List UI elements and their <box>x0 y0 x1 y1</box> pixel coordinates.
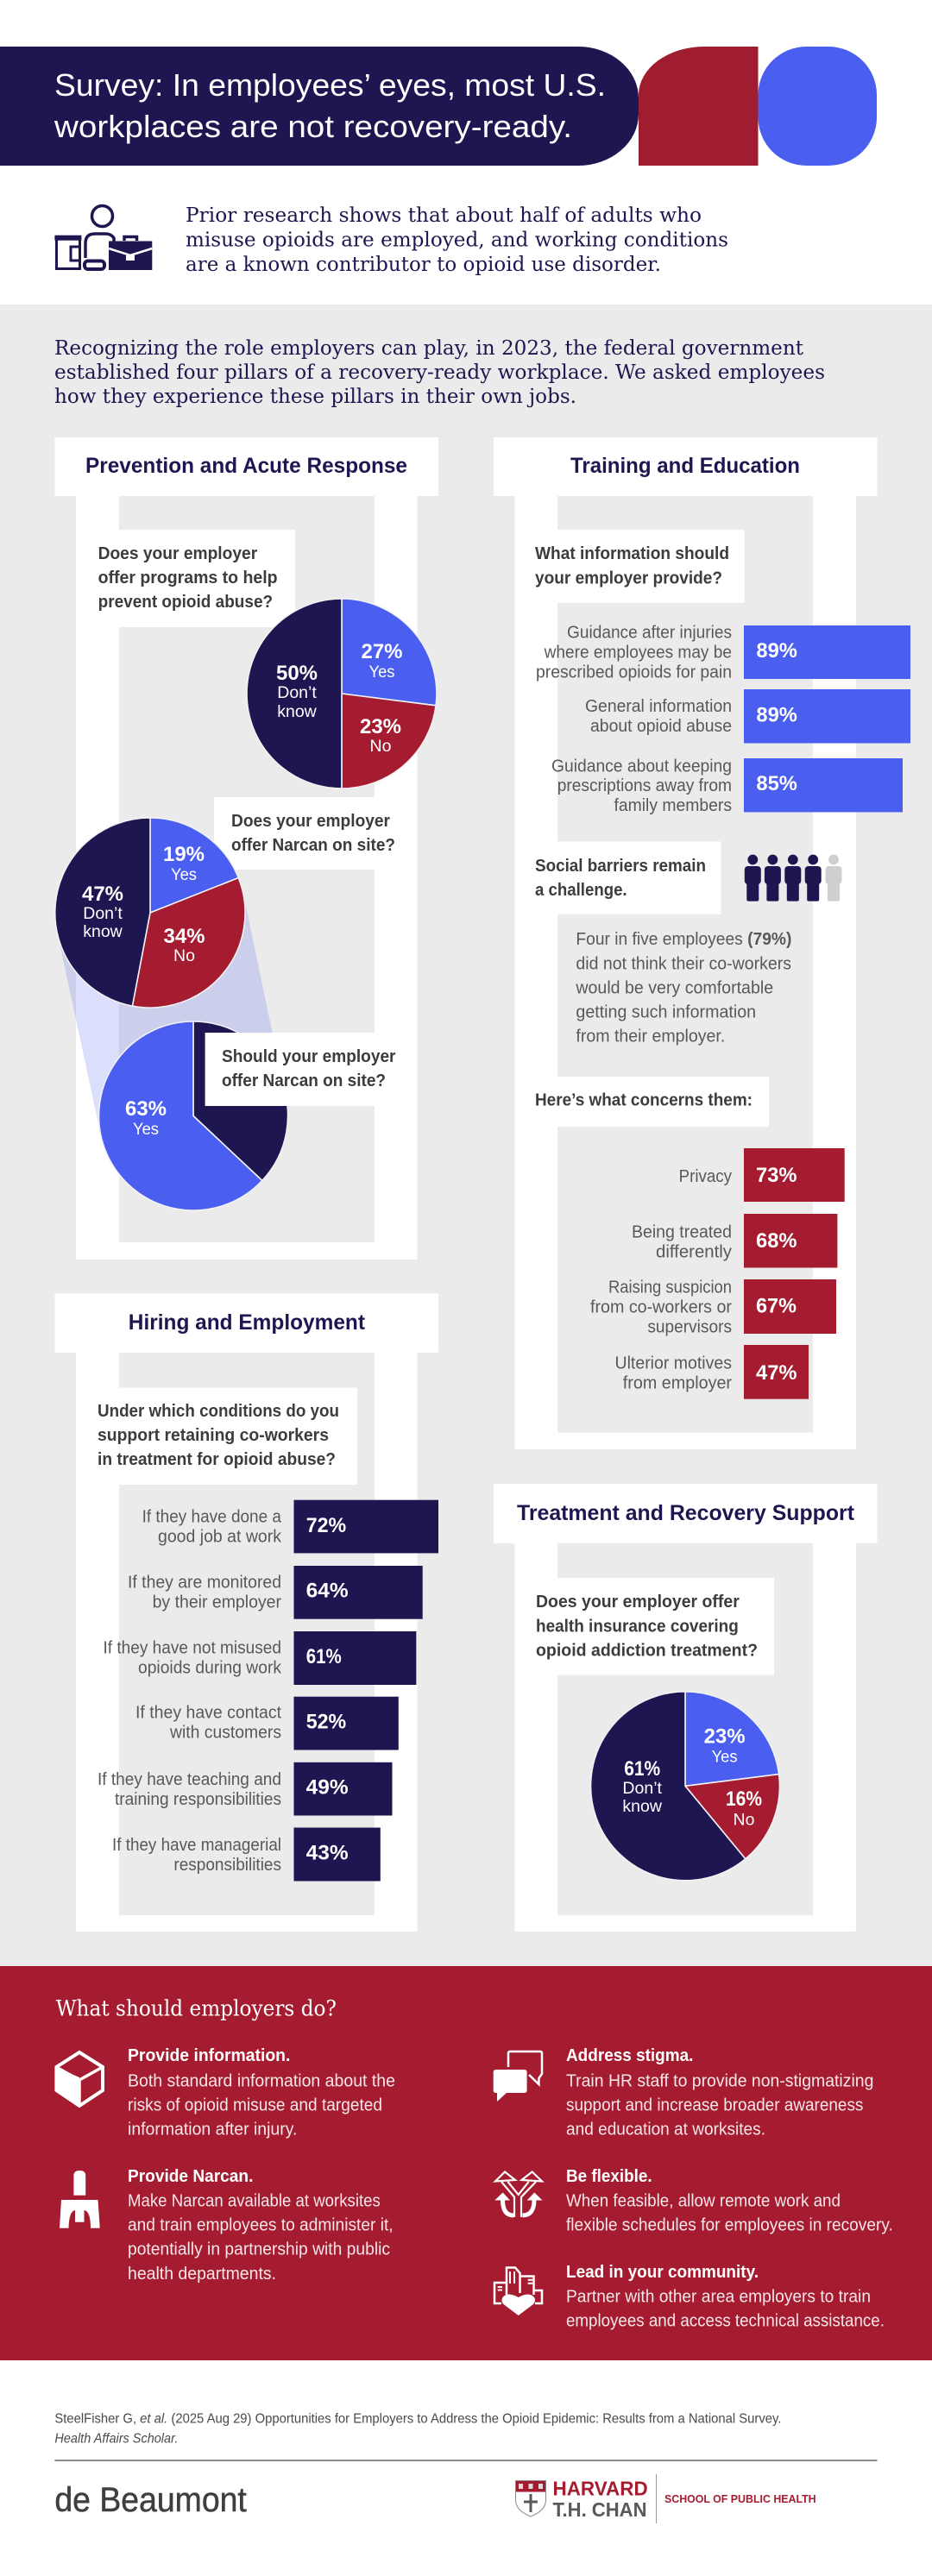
pie chart: employer offers Narcan: No <box>173 946 195 965</box>
bar chart: conditions for retaining co-workers: by their employer <box>153 1593 281 1612</box>
text: be flexible: flexible schedules for employees in recovery. <box>566 2215 893 2234</box>
bar chart: information employer should provide: prescribed opioids for pain <box>536 663 732 682</box>
bar chart: concerns: Privacy <box>679 1167 732 1186</box>
bar chart: conditions for retaining co-workers: good job at work <box>158 1528 282 1547</box>
question: health insurance: opioid addiction treatment? <box>536 1641 758 1660</box>
text: provide Narcan: health departments. <box>128 2265 276 2284</box>
text: provide Narcan: and train employees to administer it, <box>128 2215 394 2234</box>
title banner <box>0 47 877 166</box>
heading: Training and Education: Training and Education <box>570 454 800 478</box>
survey section background <box>0 305 932 1966</box>
intro text: are a known contributor to opioid use disorder. <box>186 254 661 276</box>
bar chart: concerns: Raising suspicion <box>608 1279 732 1297</box>
question: prevention programs: offer programs to help <box>98 569 278 587</box>
text: address stigma: Address stigma. <box>566 2046 693 2065</box>
question: prevention programs: Does your employer <box>98 544 257 563</box>
pie chart: employer offers Narcan <box>55 818 245 1008</box>
pie chart: prevention programs: 27% <box>361 640 403 663</box>
bar chart: concerns: differently <box>656 1243 732 1262</box>
text block: four in five employees: from their employer. <box>576 1027 725 1046</box>
text block: four in five employees: would be very comfortable <box>575 979 773 998</box>
question: retaining co-workers: Under which conditions do you <box>98 1402 339 1421</box>
bar chart: conditions for retaining co-workers: If they have not misused <box>104 1639 281 1658</box>
bar chart: information employer should provide: family members <box>614 796 732 815</box>
pie chart: prevention programs: Yes <box>369 663 395 682</box>
question: Narcan on site: Does your employer <box>231 812 390 831</box>
bar chart: conditions for retaining co-workers: If they have teaching and <box>98 1770 281 1789</box>
text: provide information: Provide information. <box>128 2046 290 2065</box>
text: provide Narcan: Provide Narcan. <box>128 2167 253 2186</box>
question: retaining co-workers <box>98 1388 357 1485</box>
pie chart: health insurance: Don’t <box>622 1779 663 1798</box>
heading: Hiring and Employment: Hiring and Employment <box>129 1310 366 1335</box>
subheading: social barriers <box>535 841 721 914</box>
bar chart: conditions for retaining co-workers: If they are monitored <box>128 1574 281 1593</box>
icon: person with desk and briefcase <box>54 205 152 270</box>
pie chart: health insurance <box>591 1692 779 1881</box>
logo: Harvard T.H. Chan School of Public Health: HARVARD <box>552 2478 648 2500</box>
bar chart: conditions for retaining co-workers: 43% <box>306 1841 349 1865</box>
pie chart: employer offers Narcan: know <box>83 922 123 941</box>
icon: speech bubbles <box>494 2051 542 2102</box>
bar chart: conditions for retaining co-workers: training responsibilities <box>115 1790 281 1809</box>
question: retaining co-workers: support retaining co-workers <box>98 1426 329 1445</box>
pie chart: employer offers Narcan: 34% <box>163 925 205 948</box>
text: address stigma: Train HR staff to provide non-stigmatizing <box>566 2071 873 2090</box>
text: provide Narcan <box>128 2167 394 2284</box>
panel: Training and Education <box>494 437 910 1449</box>
heading: Hiring and Employment <box>54 1293 438 1353</box>
bar chart: conditions for retaining co-workers: with customers <box>169 1724 281 1743</box>
panel: Prevention and Acute Response <box>54 437 438 1260</box>
text block: four in five employees: Four in five employees (79%) <box>576 930 791 949</box>
bar chart: information employer should provide: 89% <box>756 639 797 663</box>
bar chart: concerns: Being treated <box>632 1223 732 1242</box>
text: provide information <box>128 2046 395 2139</box>
bar chart: information employer should provide: Guidance after injuries <box>567 624 732 643</box>
bar chart: concerns: 68% <box>756 1229 797 1253</box>
context paragraph: Recognizing the role employers can play, in 2023, the federal government <box>54 337 804 360</box>
text: lead in your community: Lead in your community. <box>566 2263 759 2282</box>
text: provide information: risks of opioid misuse and targeted <box>128 2095 382 2114</box>
text: provide Narcan: Make Narcan available at worksites <box>128 2191 381 2210</box>
question: Narcan on site <box>214 797 395 870</box>
bar chart: conditions for retaining co-workers: 52% <box>306 1710 346 1734</box>
question: what information: your employer provide? <box>535 569 722 588</box>
question: health insurance: Does your employer offer <box>536 1593 740 1612</box>
bar chart: information employer should provide: Guidance about keeping <box>551 757 732 776</box>
icon: flexible arrows <box>494 2172 542 2217</box>
icon: community buildings and heart <box>494 2267 542 2315</box>
bar chart: information employer should provide: prescriptions away from <box>557 776 732 795</box>
text: be flexible <box>566 2167 893 2234</box>
icon: cube <box>54 2052 103 2108</box>
text: lead in your community: employees and access technical assistance. <box>566 2311 885 2330</box>
bar chart: concerns: 47% <box>756 1361 797 1385</box>
citation: SteelFisher G, et al. (2025 Aug 29) Opportunities for Employers to Address the Opioid Epidemic: Results from a National Survey. <box>54 2412 781 2427</box>
heading: Training and Education <box>494 437 878 496</box>
text: be flexible: When feasible, allow remote work and <box>566 2191 841 2210</box>
pie chart: prevention programs: Don’t <box>277 683 317 702</box>
bar chart: information employer should provide: 89% <box>756 704 797 727</box>
question: should offer Narcan <box>205 1033 396 1106</box>
text: address stigma: and education at worksites. <box>566 2120 765 2139</box>
pie chart: employer offers Narcan: Yes <box>171 865 197 884</box>
bar chart: conditions for retaining co-workers: If they have managerial <box>112 1836 281 1855</box>
pie chart: health insurance: 61% <box>624 1757 660 1781</box>
bar chart: information employer should provide <box>536 624 910 815</box>
pie chart: employer offers Narcan: Don’t <box>83 904 123 923</box>
pie chart: health insurance: Yes <box>712 1748 738 1767</box>
text block: four in five employees: getting such information <box>576 1003 756 1022</box>
bar chart: concerns: 67% <box>756 1295 797 1318</box>
question: should offer Narcan: offer Narcan on site? <box>222 1071 386 1090</box>
context paragraph: how they experience these pillars in their own jobs. <box>54 386 576 408</box>
pie chart: employer should offer Narcan: 63% <box>125 1097 167 1121</box>
question: health insurance: health insurance covering <box>536 1617 739 1636</box>
bar chart: concerns: 73% <box>756 1164 797 1187</box>
panel: Treatment and Recovery Support <box>494 1484 878 1932</box>
heading: What should employers do: What should employers do? <box>56 1996 337 2021</box>
text: provide information: Both standard information about the <box>128 2071 395 2090</box>
text: address stigma <box>566 2046 873 2139</box>
heading: Prevention and Acute Response: Prevention and Acute Response <box>85 454 407 478</box>
bar chart: concerns <box>590 1148 845 1399</box>
bar chart: information employer should provide: about opioid abuse <box>590 717 732 736</box>
citation: Health Affairs Scholar. <box>54 2431 178 2446</box>
icon: four of five people <box>745 855 842 902</box>
logo: Harvard T.H. Chan School of Public Health: SCHOOL OF PUBLIC HEALTH <box>664 2492 816 2505</box>
intro text <box>186 204 728 276</box>
subheading: concerns: Here’s what concerns them: <box>535 1091 753 1110</box>
text: lead in your community: Partner with other area employers to train <box>566 2287 871 2306</box>
text: be flexible: Be flexible. <box>566 2167 652 2186</box>
subheading: concerns <box>535 1077 769 1127</box>
subheading: social barriers: a challenge. <box>535 881 627 900</box>
bar chart: conditions for retaining co-workers <box>98 1500 438 1881</box>
question: prevention programs: prevent opioid abuse? <box>98 593 273 612</box>
pie chart: health insurance: 23% <box>704 1725 746 1748</box>
bar chart: concerns: supervisors <box>647 1318 732 1337</box>
bar chart: concerns: Ulterior motives <box>614 1354 732 1373</box>
pie chart: health insurance: 16% <box>726 1787 762 1811</box>
logo: Harvard T.H. Chan School of Public Health: T.H. CHAN <box>552 2498 647 2521</box>
title banner: Survey: In employees’ eyes, most U.S. <box>54 67 606 103</box>
pie chart: prevention programs: 23% <box>360 715 401 738</box>
icon: Narcan nasal spray <box>60 2171 100 2228</box>
panel: Hiring and Employment <box>54 1293 438 1932</box>
bar chart: conditions for retaining co-workers: 61% <box>306 1645 342 1668</box>
text: provide Narcan: potentially in partnership with public <box>128 2240 390 2259</box>
question: health insurance <box>536 1578 774 1675</box>
pie chart: employer offers Narcan: 19% <box>163 843 205 866</box>
heading: Treatment and Recovery Support: Treatment and Recovery Support <box>517 1501 855 1525</box>
bar chart: conditions for retaining co-workers: If they have done a <box>142 1508 282 1527</box>
connector between Narcan pies <box>57 893 286 1135</box>
pie chart: health insurance: No <box>734 1810 755 1829</box>
intro text: Prior research shows that about half of adults who <box>186 204 702 227</box>
subheading: social barriers: Social barriers remain <box>535 857 706 876</box>
logo: Harvard T.H. Chan School of Public Health <box>516 2474 816 2523</box>
intro text: misuse opioids are employed, and working conditions <box>186 229 728 252</box>
context paragraph: established four pillars of a recovery-ready workplace. We asked employees <box>54 361 825 384</box>
bar chart: information employer should provide: General information <box>585 697 732 716</box>
pie chart: employer should offer Narcan <box>99 1021 288 1210</box>
bar chart: conditions for retaining co-workers: opioids during work <box>138 1659 282 1678</box>
text block: four in five employees: did not think their co-workers <box>576 954 791 973</box>
panel: What should employers do <box>0 1966 932 2360</box>
title banner: workplaces are not recovery-ready. <box>54 109 572 144</box>
pie chart: health insurance: know <box>622 1797 663 1816</box>
pie chart: prevention programs: 50% <box>276 662 318 685</box>
bar chart: conditions for retaining co-workers: If they have contact <box>135 1704 281 1723</box>
question: what information <box>535 530 745 603</box>
bar chart: conditions for retaining co-workers: 72% <box>306 1514 346 1537</box>
question: Narcan on site: offer Narcan on site? <box>231 836 395 855</box>
logo: de Beaumont: de Beaumont <box>54 2481 247 2519</box>
pie chart: prevention programs <box>247 599 437 789</box>
bar chart: conditions for retaining co-workers: 49% <box>306 1775 349 1800</box>
bar chart: conditions for retaining co-workers: 64% <box>306 1579 349 1602</box>
question: prevention programs <box>98 530 295 627</box>
bar chart: concerns: from employer <box>623 1373 732 1392</box>
text: address stigma: support and increase broader awareness <box>566 2095 863 2114</box>
text: provide information: information after injury. <box>128 2120 297 2139</box>
heading: Treatment and Recovery Support <box>494 1484 878 1543</box>
bar chart: conditions for retaining co-workers: responsibilities <box>173 1856 281 1875</box>
bar chart: information employer should provide: 85% <box>756 772 797 795</box>
question: retaining co-workers: in treatment for opioid abuse? <box>98 1450 336 1469</box>
pie chart: prevention programs: No <box>370 737 392 756</box>
bar chart: information employer should provide: where employees may be <box>544 644 732 663</box>
text: lead in your community <box>566 2263 885 2330</box>
heading: Prevention and Acute Response <box>54 437 438 496</box>
question: what information: What information should <box>535 544 729 563</box>
bar chart: concerns: from co-workers or <box>590 1298 732 1317</box>
pie chart: employer offers Narcan: 47% <box>82 883 123 906</box>
text block: four in five employees <box>575 930 791 1046</box>
citation <box>54 2412 781 2446</box>
question: should offer Narcan: Should your employer <box>222 1047 396 1066</box>
context paragraph <box>54 337 825 408</box>
pie chart: prevention programs: know <box>277 702 318 721</box>
pie chart: employer should offer Narcan: Yes <box>133 1120 159 1139</box>
